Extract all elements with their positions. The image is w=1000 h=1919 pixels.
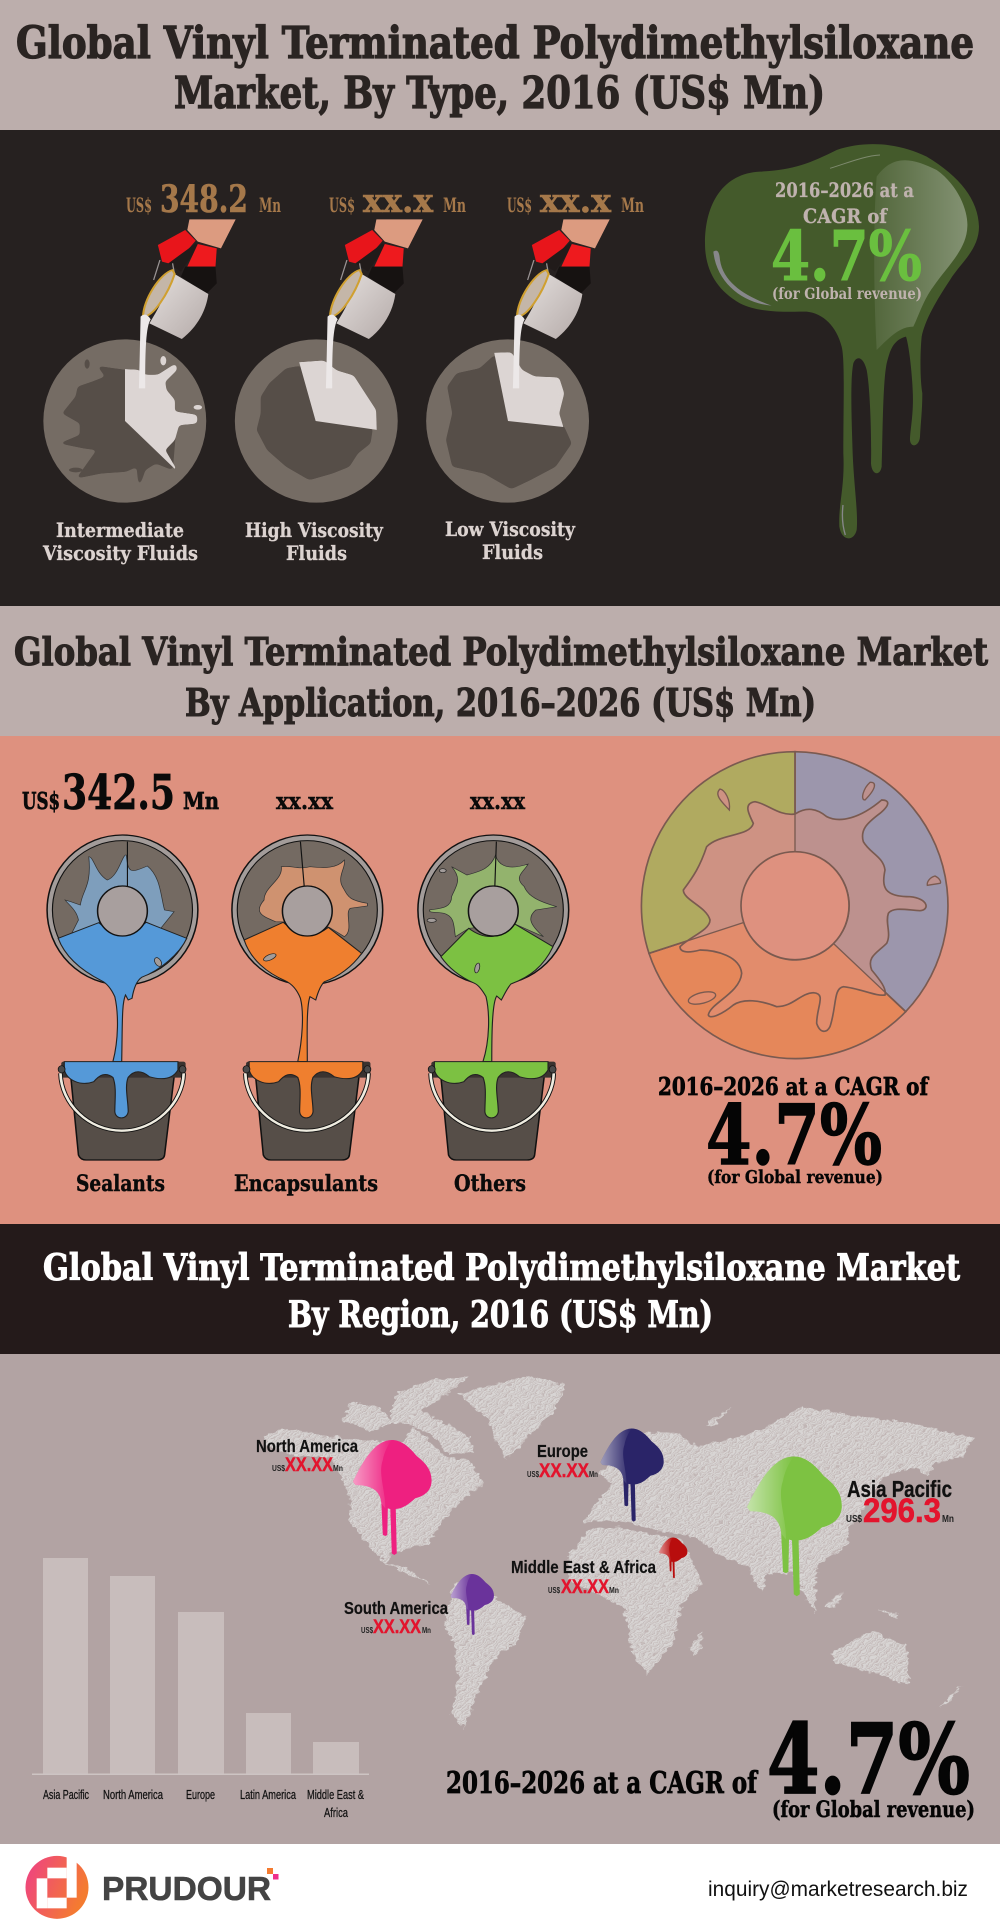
value: others: xx.xx [470, 788, 525, 815]
panel: market by region [0, 1354, 1000, 1844]
label: middle east and africa: Middle East & Africa [511, 1557, 656, 1577]
label: encapsulants: Encapsulants [234, 1171, 378, 1197]
label: low viscosity fluids: Low Viscosity [445, 517, 576, 541]
panel: market by application [0, 736, 1000, 1224]
heading band: by type [0, 0, 1000, 130]
label: low viscosity fluids [445, 517, 576, 564]
pie chart: low viscosity fluids [426, 339, 589, 503]
label: middle east and africa: XX.XX [561, 1577, 609, 1598]
CAGR callout: by region [446, 1703, 975, 1823]
value: sealants: US$ [22, 788, 60, 815]
contact email: inquiry@marketresearch.biz [708, 1878, 968, 1901]
heading band: by region [0, 1224, 1000, 1354]
paint drip pin: asia pacific [747, 1456, 842, 1596]
label: low viscosity fluids: Fluids [482, 540, 543, 564]
title: by application: By Application, 2016–2026 (US$ Mn) [185, 681, 816, 726]
world map sketch [265, 1375, 974, 1728]
logo: prudour mark [25, 1854, 88, 1919]
label: europe: US$ [527, 1470, 539, 1479]
label: asia pacific: Mn [942, 1514, 954, 1525]
callout: green paint drip CAGR [705, 144, 979, 538]
label: asia pacific [846, 1476, 954, 1530]
logo: prudour wordmark: PRUDOUR [102, 1870, 271, 1907]
CAGR callout: by region: 2016–2026 at a CAGR of [446, 1766, 759, 1801]
paint disc and bucket: others [418, 835, 569, 1160]
label: intermediate viscosity fluids: Viscosity Fluids [42, 541, 198, 565]
bar chart: Africa [324, 1806, 348, 1820]
label: south america: XX.XX [373, 1617, 421, 1638]
label: europe: XX.XX [539, 1461, 589, 1482]
label: intermediate viscosity fluids [42, 518, 198, 565]
label: europe [527, 1441, 598, 1482]
value: sealants: Mn [183, 788, 219, 815]
value: intermediate viscosity: Mn [259, 193, 281, 217]
paint disc and bucket: encapsulants [232, 835, 383, 1160]
value: intermediate viscosity: US$ [126, 193, 152, 217]
label: others: Others [454, 1171, 526, 1197]
callout: green paint drip CAGR: 4.7% [771, 217, 922, 297]
label: europe: Europe [537, 1441, 588, 1461]
paint drip pin: south america [450, 1574, 494, 1635]
label: high viscosity fluids: High Viscosity [245, 518, 384, 542]
paint drip pin: europe [600, 1428, 664, 1522]
value: high viscosity: Mn [443, 193, 466, 217]
bar chart: North America [103, 1788, 163, 1802]
bar chart: Middle East & [307, 1788, 364, 1802]
title: by region: By Region, 2016 (US$ Mn) [288, 1294, 713, 1336]
label: asia pacific: 296.3 [863, 1492, 941, 1530]
label: north america: XX.XX [285, 1455, 333, 1476]
bar chart: Asia Pacific [43, 1788, 89, 1802]
value: sealants: 342.5 [62, 765, 175, 821]
CAGR callout: by application: 4.7% [706, 1088, 882, 1184]
donut chart with splash [641, 752, 948, 1059]
label: middle east and africa [511, 1557, 656, 1598]
title: by region [43, 1247, 960, 1336]
label: middle east and africa: US$ [548, 1586, 560, 1595]
icon: hand pouring bucket 3 [513, 219, 610, 388]
value: low viscosity: US$ [507, 193, 532, 217]
paint disc and bucket: sealants [47, 835, 198, 1160]
bar chart: Europe [186, 1788, 215, 1802]
label: north america: Mn [333, 1464, 343, 1473]
label: middle east and africa: Mn [609, 1586, 619, 1595]
value: low viscosity: Mn [621, 193, 644, 217]
label: south america: US$ [361, 1626, 373, 1635]
callout: green paint drip CAGR: CAGR of [803, 204, 888, 228]
label: europe: Mn [589, 1470, 598, 1479]
title: by type [16, 18, 974, 119]
value: intermediate viscosity: 348.2 [160, 177, 248, 221]
label: south america: South America [344, 1598, 448, 1618]
label: asia pacific: Asia Pacific [847, 1476, 952, 1502]
label: north america: US$ [272, 1464, 285, 1473]
callout: green paint drip CAGR: 2016–2026 at a [775, 178, 914, 202]
value: high viscosity [329, 181, 466, 220]
label: high viscosity fluids [245, 518, 384, 565]
label: north america: North America [256, 1436, 358, 1456]
heading band: by application [0, 606, 1000, 736]
icon: hand pouring bucket 2 [326, 219, 423, 388]
value: low viscosity [507, 181, 644, 220]
footer [0, 1844, 1000, 1919]
value: encapsulants: xx.xx [276, 788, 333, 815]
CAGR callout: by application [658, 1072, 929, 1188]
label: intermediate viscosity fluids: Intermediate [56, 518, 184, 542]
paint drip pin: north america [353, 1440, 432, 1555]
label: north america [256, 1436, 358, 1476]
pie chart: high viscosity fluids [235, 339, 398, 503]
label: south america [344, 1598, 448, 1638]
CAGR callout: by application: (for Global revenue) [707, 1167, 883, 1188]
label: high viscosity fluids: Fluids [286, 541, 347, 565]
label: south america: Mn [422, 1626, 431, 1635]
label: asia pacific: US$ [846, 1514, 862, 1525]
bar chart [32, 1558, 369, 1820]
paint drip pin: middle east and africa [659, 1538, 687, 1578]
panel: market by type [0, 130, 1000, 606]
CAGR callout: by application: 2016–2026 at a CAGR of [658, 1072, 929, 1101]
pie chart: intermediate viscosity fluids [43, 339, 206, 503]
icon: hand pouring bucket 1 [139, 219, 236, 388]
title: by application [14, 630, 988, 726]
value: low viscosity: xx.x [540, 181, 611, 220]
label: sealants: Sealants [76, 1171, 165, 1197]
value: high viscosity: xx.x [363, 181, 433, 220]
value: high viscosity: US$ [329, 193, 355, 217]
bar chart: Latin America [240, 1788, 296, 1802]
title: by type: Market, By Type, 2016 (US$ Mn) [174, 68, 825, 119]
callout: green paint drip CAGR: (for Global revenue) [772, 284, 922, 303]
